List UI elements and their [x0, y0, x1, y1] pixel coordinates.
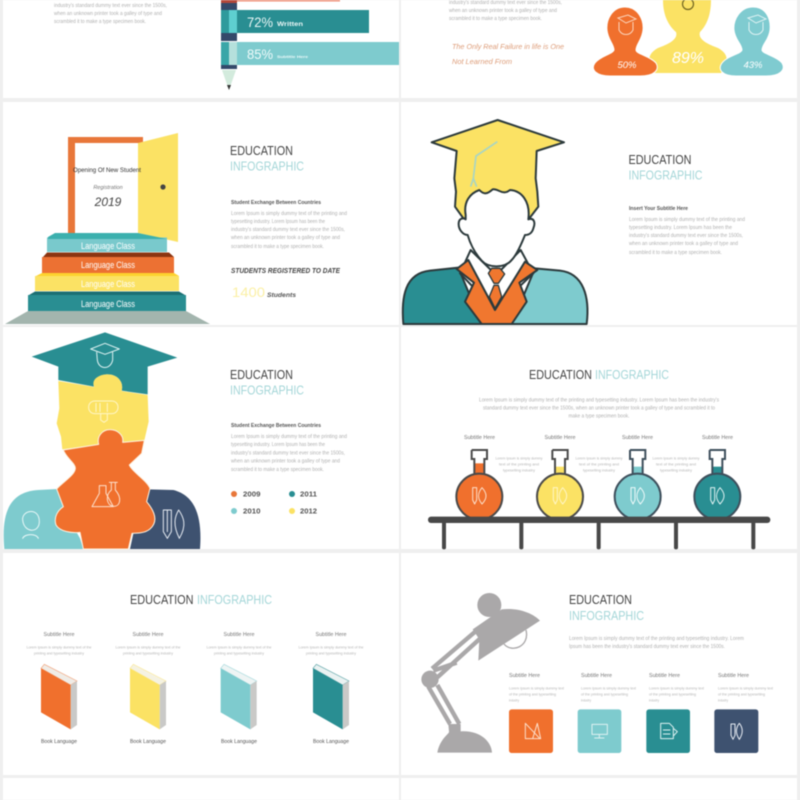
- heading: [230, 368, 304, 398]
- book: teal: [313, 664, 349, 729]
- body text: busts panel: scrambled it to make a type specimen book.: [449, 16, 542, 22]
- body text: industry's standard dummy text ever since the 1500s,: [629, 233, 743, 239]
- bust: orange 50%: 50%: [617, 60, 637, 71]
- panel: books: [3, 553, 399, 775]
- face: [459, 189, 534, 266]
- intro text: standard dummy text ever since the 1500s, when an unknown printer took a galley of type and scrambled it to: [483, 406, 715, 412]
- icon: graduate: [91, 343, 119, 367]
- heading: [529, 368, 669, 382]
- flask: light teal: [615, 450, 661, 520]
- stat: 1400 students: [232, 284, 297, 300]
- piece: left shoulder: [4, 489, 83, 549]
- column subtitles: Subtitle Here: [581, 673, 612, 679]
- flask: yellow: [537, 450, 583, 520]
- column subtitles: Subtitle Here: [509, 673, 540, 679]
- icon: flasks: [92, 482, 120, 507]
- flask captions: text of the printing and: [579, 462, 619, 466]
- left shoulder: [403, 268, 482, 324]
- bar: top salmon: [237, 0, 340, 2]
- icon tiles: [509, 709, 758, 753]
- right shoulder: [512, 268, 587, 324]
- bar: 72% written: [237, 10, 369, 33]
- body text: busts panel: when an unknown printer took a galley of type and: [449, 8, 557, 14]
- column captions: Lorem Ipsum is simply dummy text: [581, 686, 636, 690]
- hair and cap: [432, 120, 564, 218]
- legend: 2011: [300, 490, 317, 498]
- book subtitles: Subtitle Here: [316, 632, 347, 638]
- tassel: [471, 142, 497, 187]
- column captions: of the printing and typesetting: [581, 692, 628, 696]
- door text: 2019: [94, 195, 122, 209]
- body text: [231, 434, 347, 473]
- intro text: make a type specimen book.: [568, 414, 630, 420]
- tile: monitor: [578, 709, 621, 753]
- panels: bottom row: [3, 778, 797, 800]
- body text: Lorem Ipsum is simply dummy text of the printing and: [231, 434, 347, 440]
- body text: typesetting industry. Lorem Ipsum has been the: [629, 225, 732, 231]
- panel: pencil bar chart: [3, 0, 399, 98]
- lapels: [457, 260, 537, 324]
- panel: desk lamp: [401, 553, 797, 775]
- legend: 2012: [300, 506, 317, 516]
- intro text: Lorem Ipsum is simply dummy text of the printing and typesetting industry. Lorem Ipsum has been the industry's: [479, 398, 719, 404]
- body text: when an unknown printer took a galley of type and: [231, 235, 340, 241]
- bar: 72% written: Written: [277, 21, 303, 28]
- book captions: Lorem Ipsum is simply dummy text of the: [298, 646, 364, 650]
- intro text: [569, 636, 744, 650]
- book labels: Book Language: [130, 739, 166, 745]
- heading: INFOGRAPHIC: [230, 160, 304, 174]
- heading: INFOGRAPHIC: [197, 593, 272, 607]
- book captions: Lorem Ipsum is simply dummy text of the: [26, 646, 92, 650]
- shirt: [460, 250, 533, 310]
- bar: 85% subtitle: Subtitle Here: [277, 54, 309, 59]
- column captions: industry: [649, 698, 659, 702]
- heading: [569, 593, 644, 623]
- piece: orange: [55, 430, 155, 549]
- flask captions: typesetting industry: [660, 468, 692, 472]
- heading: [130, 593, 272, 607]
- tile: ruler: [509, 709, 553, 753]
- bust: orange 50%: [593, 7, 657, 76]
- heading: INFOGRAPHIC: [569, 609, 644, 623]
- quote: The Only Real Failure in life is One: [452, 42, 564, 51]
- panel: quote and busts: [401, 0, 797, 98]
- flask captions: typesetting industry: [583, 468, 615, 472]
- body text: when an unknown printer took a galley of type and: [629, 241, 738, 247]
- flask subtitles: Subtitle Here: [464, 435, 495, 441]
- tile: pencil and pen: [714, 709, 758, 753]
- bar: 85% subtitle: 85%: [247, 47, 273, 62]
- flask captions: [496, 456, 700, 472]
- book labels: Book Language: [41, 739, 77, 745]
- bust: yellow 89%: [649, 0, 727, 73]
- flask subtitles: [464, 435, 733, 441]
- flask subtitles: Subtitle Here: [622, 435, 653, 441]
- body text: typesetting industry. Lorem Ipsum has been the: [231, 442, 325, 448]
- book captions: Lorem Ipsum is simply dummy text of the: [116, 646, 180, 650]
- column subtitles: [509, 673, 749, 679]
- column captions: of the printing and typesetting: [718, 692, 765, 696]
- intro text: [479, 398, 719, 420]
- book captions: printing and typesetting industry: [34, 652, 84, 656]
- body text: scrambled it to make a type specimen book.: [231, 467, 324, 473]
- book subtitles: Subtitle Here: [224, 632, 255, 638]
- column captions: of the printing and typesetting: [509, 692, 556, 696]
- body text: scrambled it to make a type specimen book.: [231, 244, 324, 250]
- illustration: puzzle: [4, 332, 200, 549]
- body text: pencil panel: [54, 3, 167, 25]
- book captions: [26, 646, 364, 656]
- book subtitles: Subtitle Here: [132, 632, 164, 638]
- book: yellow: [130, 664, 166, 729]
- bar: 85% subtitle: [237, 42, 399, 65]
- stairs: [5, 233, 210, 324]
- heading: INFOGRAPHIC: [628, 168, 702, 182]
- subtitle: Student Exchange Between Countries: [231, 423, 321, 429]
- flask captions: Lorem Ipsum is simply dummy: [576, 456, 623, 460]
- column captions: [509, 686, 773, 702]
- flask subtitles: Subtitle Here: [702, 435, 733, 441]
- body text: Lorem Ipsum is simply dummy text of the printing and: [629, 217, 745, 223]
- piece: cap: [32, 332, 177, 394]
- body text: [231, 211, 347, 250]
- body text: Lorem Ipsum is simply dummy text of the printing and: [231, 211, 347, 217]
- flask captions: text of the printing and: [499, 462, 539, 466]
- book labels: Book Language: [313, 739, 349, 745]
- door text: Registration: [93, 185, 123, 191]
- column captions: Lorem Ipsum is simply dummy text: [718, 686, 773, 690]
- book labels: [41, 739, 349, 745]
- bust: teal 43%: [720, 7, 783, 76]
- panel: puzzle graduate: [3, 327, 399, 549]
- stat: 1400 students: Students: [267, 293, 297, 299]
- flask subtitles: Subtitle Here: [544, 435, 576, 441]
- column captions: of the printing and typesetting: [649, 692, 696, 696]
- icon: student: [23, 511, 39, 538]
- heading: EDUCATION: [130, 593, 194, 607]
- stat heading: STUDENTS REGISTERED TO DATE: [231, 268, 340, 275]
- icon: pencil and pen: [163, 510, 184, 538]
- panel: flasks on shelf: [401, 327, 797, 549]
- stat: 1400 students: 1400: [232, 284, 265, 300]
- books: [41, 664, 349, 729]
- column captions: Lorem Ipsum is simply dummy text: [649, 686, 704, 690]
- column captions: Lorem Ipsum is simply dummy text: [509, 686, 564, 690]
- bust: yellow 89%: 89%: [672, 50, 704, 67]
- icon: door: [68, 133, 178, 242]
- quote: Not Learned From: [452, 57, 512, 66]
- bust: teal 43%: 43%: [743, 60, 763, 71]
- body text: typesetting industry. Lorem Ipsum has been the: [231, 219, 325, 225]
- heading: [230, 144, 304, 174]
- column subtitles: Subtitle Here: [718, 673, 749, 679]
- flask captions: Lorem Ipsum is simply dummy: [496, 456, 543, 460]
- legend: 2010: [243, 506, 260, 516]
- body text: industry's standard dummy text ever since the 1500s,: [231, 450, 345, 456]
- body text: busts panel: industry's standard dummy text ever since the 1500s,: [449, 0, 562, 6]
- stairs: Language Class: [81, 279, 135, 289]
- bar: 72% written: 72%: [247, 15, 273, 30]
- piece: right shoulder: [130, 489, 200, 549]
- book captions: printing and typesetting industry: [123, 652, 173, 656]
- book subtitles: [44, 632, 347, 638]
- flask captions: typesetting industry: [503, 468, 535, 472]
- heading: EDUCATION: [230, 144, 293, 158]
- body text: pencil panel: industry's standard dummy text ever since the 1500s,: [54, 3, 167, 9]
- flasks and shelf: [428, 450, 770, 549]
- shelf: [428, 517, 770, 549]
- book subtitles: Subtitle Here: [44, 632, 75, 638]
- legend: [231, 490, 317, 516]
- flask captions: Lorem Ipsum is simply dummy: [652, 456, 700, 460]
- legend: 2009: [243, 490, 260, 498]
- stairs: Language Class: [81, 241, 135, 251]
- flask: orange: [456, 450, 502, 520]
- body text: scrambled it to make a type specimen book.: [629, 250, 722, 256]
- heading: [628, 153, 702, 182]
- stairs: Language Class: [81, 260, 135, 270]
- intro text: Ipsum has been the industry's standard dummy text ever since the 1500s.: [569, 644, 725, 650]
- door text: Opening Of New Student: [73, 167, 141, 174]
- icon: diploma: [89, 401, 118, 422]
- subtitle: Student Exchange Between Countries: [231, 200, 321, 206]
- body text: pencil panel: when an unknown printer took a galley of type and: [54, 11, 162, 17]
- heading: EDUCATION: [569, 593, 632, 607]
- flask: teal: [694, 450, 740, 520]
- heading: EDUCATION: [529, 368, 592, 382]
- illustration: graduate: [403, 120, 587, 324]
- panel: door and stairs: [3, 102, 399, 325]
- tile: document: [646, 709, 690, 753]
- column captions: industry: [581, 698, 591, 702]
- panel: graduate portrait: [401, 102, 797, 325]
- book labels: Book Language: [221, 739, 257, 745]
- subtitle: Insert Your Subtitle Here: [629, 206, 688, 212]
- book: orange: [41, 664, 77, 729]
- body text: [629, 217, 745, 256]
- book: light teal: [221, 664, 257, 729]
- heading: EDUCATION: [230, 368, 293, 382]
- heading: INFOGRAPHIC: [230, 384, 304, 398]
- flask captions: text of the printing and: [656, 462, 696, 466]
- icon: pencil: [221, 0, 237, 90]
- body text: pencil panel: scrambled it to make a type specimen book.: [54, 19, 146, 25]
- intro text: Lorem Ipsum is simply dummy text of the printing and typesetting industry. Lorem: [569, 636, 744, 642]
- column subtitles: Subtitle Here: [649, 673, 680, 679]
- door text: [73, 167, 141, 209]
- body text: when an unknown printer took a galley of type and: [231, 458, 340, 464]
- book captions: printing and typesetting industry: [306, 652, 356, 656]
- book captions: printing and typesetting industry: [214, 652, 264, 656]
- column captions: industry: [718, 698, 728, 702]
- tie: [488, 268, 505, 308]
- book captions: Lorem Ipsum is simply dummy text of the: [206, 646, 272, 650]
- column captions: industry: [509, 698, 519, 702]
- icon: desk lamp: [421, 593, 540, 753]
- stairs: Language Class: [81, 299, 135, 309]
- heading: EDUCATION: [628, 153, 692, 167]
- body text: busts panel: [449, 0, 562, 22]
- heading: INFOGRAPHIC: [595, 368, 669, 382]
- piece: yellow: [57, 374, 149, 449]
- body text: industry's standard dummy text ever since the 1500s,: [231, 227, 345, 233]
- quote: [452, 42, 564, 66]
